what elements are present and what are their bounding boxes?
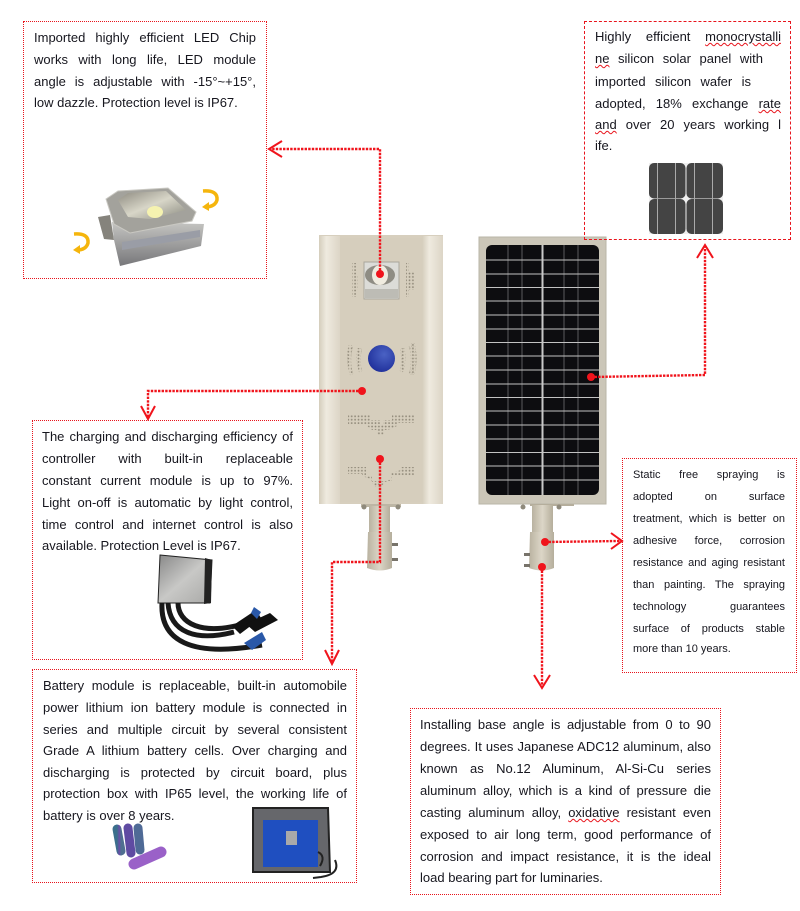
panel: solar panel description: and over 20 years working l [595, 117, 781, 132]
panel: LED chip description: works with long life, LED module [34, 52, 256, 67]
connector: controller to its description [141, 391, 362, 419]
panel: solar panel description: ife. [595, 138, 612, 153]
panel: solar panel description: adopted, 18% exchange rate [595, 96, 781, 111]
panel: solar panel description [584, 21, 791, 240]
connector: installing base to its description [534, 567, 550, 688]
panel: spraying description: adopted on surface [633, 491, 785, 503]
panel: installing base description: degrees. It uses Japanese ADC12 aluminum, also [420, 739, 711, 754]
panel: spraying description: adhesive force, corrosion [633, 535, 785, 547]
connector dot: solar panel [587, 373, 595, 381]
panel: spraying description [622, 458, 797, 673]
panel: installing base description: load bearing part for luminaries. [420, 870, 603, 885]
panel: battery description: Grade A lithium battery cells. Over charging and [43, 743, 347, 758]
panel: battery description [32, 669, 357, 883]
panel: solar panel description: Highly efficient monocrystalli [595, 29, 781, 44]
panel: controller description: constant current module is up to 97%. [42, 473, 293, 488]
panel: controller description: available. Protection Level is IP67. [42, 538, 241, 553]
panel: controller description: Light on-off is automatic by light control, [42, 495, 293, 510]
panel: controller description: controller with built-in replaceable [42, 451, 293, 466]
panel: LED chip description: Imported highly efficient LED Chip [34, 30, 256, 45]
panel: spraying description: resistance and aging resistant [633, 557, 785, 569]
panel: solar panel description: ne silicon solar panel with [595, 51, 763, 66]
panel: installing base description [410, 708, 721, 895]
panel: installing base description: aluminum alloy, which is a kind of pressure die [420, 783, 711, 798]
connector dot: controller [358, 387, 366, 395]
connector: battery to its description [325, 459, 380, 664]
panel: battery description: power lithium ion battery module is connected in [43, 700, 347, 715]
panel: battery description: series and multiple circuit by several consistent [43, 722, 347, 737]
connector: solar panel to its description [591, 245, 713, 377]
photo: lithium battery cells [117, 828, 161, 864]
rear view of street lamp with solar panel [479, 237, 606, 570]
photo: LED module [98, 188, 204, 266]
panel: installing base description: known as No.12 Aluminum, Al-Si-Cu series [420, 761, 711, 776]
icon: rotation arrow lower [74, 234, 88, 250]
panel: spraying description: surface of products stable [633, 623, 785, 635]
connector dot: installing base [538, 563, 546, 571]
panel: spraying description: treatment, which is better on [633, 513, 785, 525]
panel: spraying description: than painting. The spraying [633, 579, 785, 591]
panel: controller description: The charging and discharging efficiency of [42, 429, 293, 444]
panel: spraying description: Static free spraying is [633, 469, 785, 481]
panel: spraying description: technology guarantees [633, 601, 785, 613]
icon: rotation arrowhead lower [73, 245, 80, 254]
front view of street lamp [319, 235, 443, 570]
panel: LED chip description: angle is adjustable with -15°~+15°, [34, 74, 256, 89]
connector: spraying to its description [545, 533, 622, 549]
panel: LED chip description: low dazzle. Protection level is IP67. [34, 95, 238, 110]
icon: rotation arrowhead upper [202, 202, 209, 211]
photo: battery box [253, 808, 336, 878]
panel: spraying description: more than 10 years. [633, 643, 731, 655]
connector dot: battery [376, 455, 384, 463]
panel: battery description: discharging is protected by circuit board, plus [43, 765, 347, 780]
connector: LED chip to its description [269, 141, 380, 274]
panel: installing base description: casting aluminum alloy, oxidative resistant even [420, 805, 711, 820]
panel: LED chip description [23, 21, 267, 279]
panel: controller description: time control and internet control is also [42, 517, 293, 532]
photo: controller with cables [158, 555, 278, 650]
connector dot: spraying [541, 538, 549, 546]
panel: controller description [32, 420, 303, 660]
connector dot: LED chip [376, 270, 384, 278]
panel: battery description: battery is over 8 years. [43, 808, 174, 823]
panel: installing base description: exposed to air long term, good performance of [420, 827, 711, 842]
panel: battery description: Battery module is replaceable, built-in automobile [43, 678, 347, 693]
panel: installing base description: Installing base angle is adjustable from 0 to 90 [420, 717, 711, 732]
panel: installing base description: corrosion and impact resistance, it is the ideal [420, 849, 711, 864]
photo: solar cell [649, 163, 723, 234]
panel: solar panel description: imported silicon wafer is [595, 74, 751, 89]
panel: battery description: protection box with IP65 level, the working life of [43, 786, 347, 801]
icon: rotation arrow upper [203, 191, 217, 207]
